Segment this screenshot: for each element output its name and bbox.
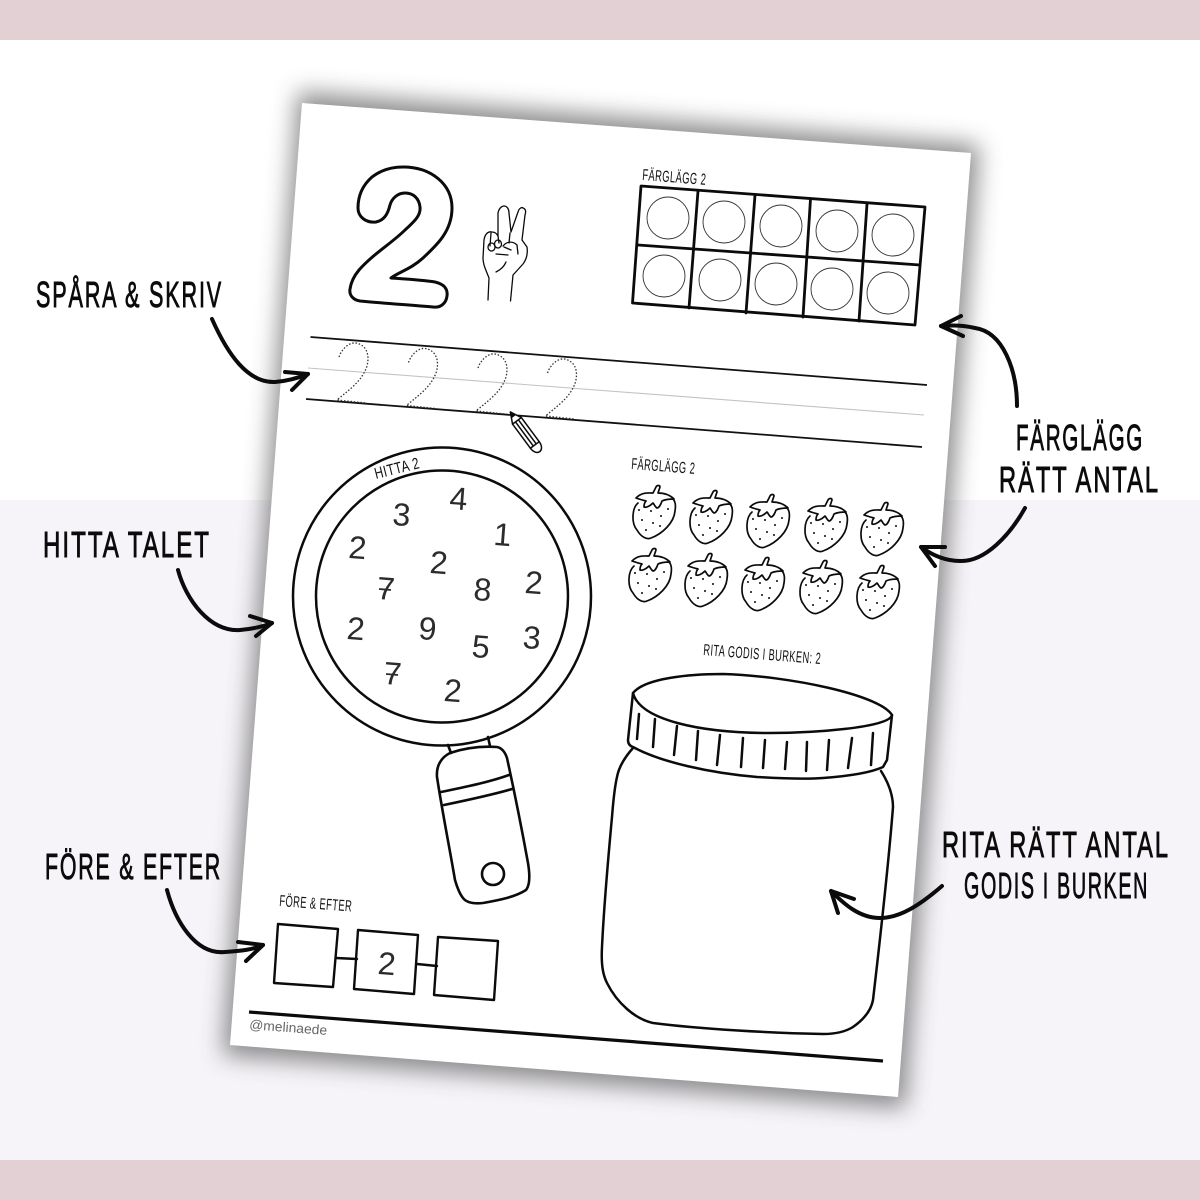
heading: hitta 2: HITTA 2 xyxy=(373,455,422,483)
numbers to search: 3 xyxy=(391,496,412,533)
label: färglägg rätt antal xyxy=(999,417,1160,500)
label: rita rätt antal godis xyxy=(942,824,1170,906)
credit: @melinaede xyxy=(249,1017,328,1038)
worksheet sheet xyxy=(230,103,971,1097)
label: spåra och skriv: SPÅRA & SKRIV xyxy=(36,274,223,315)
label: före och efter: FÖRE & EFTER xyxy=(45,846,222,887)
magnifier handle xyxy=(437,737,529,903)
numbers to search: 9 xyxy=(417,610,438,647)
footer line xyxy=(249,1012,883,1061)
icon: pencil xyxy=(506,409,544,455)
magnifier lens rings xyxy=(293,448,591,746)
numbers to search: 2 xyxy=(347,529,368,566)
heading: rita godis: RITA GODIS I BURKEN: 2 xyxy=(703,642,822,668)
numbers to search xyxy=(346,480,544,709)
numbers to search: 8 xyxy=(472,571,493,608)
arrow: to strawberries xyxy=(921,508,1025,566)
numbers to search: 2 xyxy=(429,544,449,581)
numbers to search: 4 xyxy=(448,480,469,517)
numbers to search: 5 xyxy=(471,628,491,665)
numbers to search: 2 xyxy=(524,564,544,601)
numbers to search: 7 xyxy=(376,570,396,607)
handwriting lines with dotted number 2 xyxy=(306,337,927,447)
candy jar xyxy=(602,674,893,1034)
arrow: to tracing lines xyxy=(212,319,308,390)
ten frame with circles xyxy=(632,186,925,325)
heading: före och efter: FÖRE & EFTER xyxy=(279,892,353,916)
icon: hand showing two fingers xyxy=(483,206,527,301)
arrow: to boxes xyxy=(167,890,263,961)
paper shadow xyxy=(223,92,979,1108)
before and after boxes xyxy=(274,924,498,1000)
strawberries xyxy=(629,486,903,619)
arrow: to jar xyxy=(831,886,942,918)
numbers to search: 2 xyxy=(346,610,366,647)
numbers to search: 7 xyxy=(382,655,403,692)
heading: färglägg ten frame: FÄRGLÄGG 2 xyxy=(642,166,707,189)
arrow: to ten frame xyxy=(941,316,1017,406)
label: hitta talet: HITTA TALET xyxy=(43,524,211,565)
magnifying glass xyxy=(293,448,591,903)
heading: färglägg strawberries: FÄRGLÄGG 2 xyxy=(631,455,696,478)
numbers to search: 3 xyxy=(522,619,542,656)
before and after boxes: 2 xyxy=(377,945,397,982)
numbers to search: 2 xyxy=(443,672,463,709)
numbers to search: 1 xyxy=(492,516,513,553)
big outlined number 2 xyxy=(350,167,452,307)
arrow: to magnifier xyxy=(178,570,272,636)
